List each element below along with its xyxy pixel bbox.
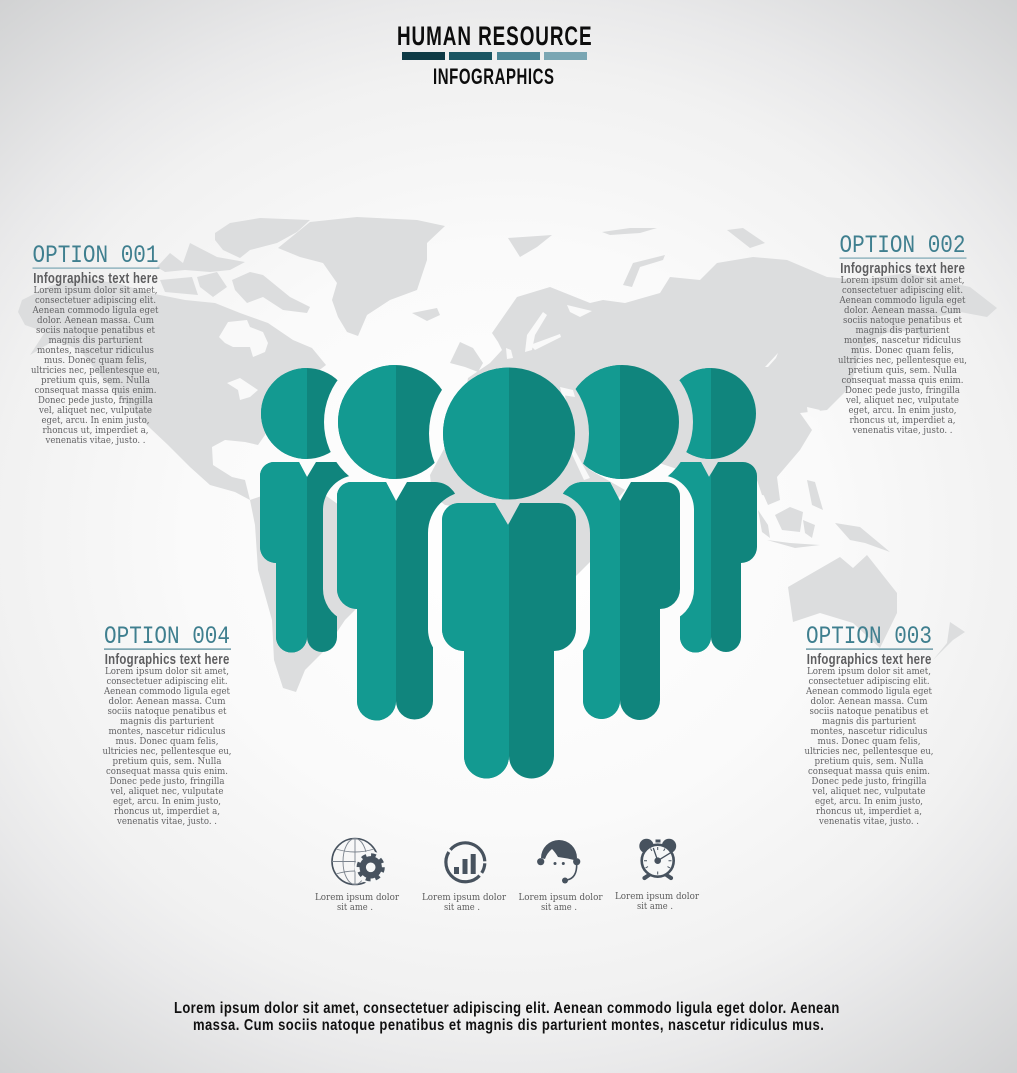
icon caption: globe: sit ame . (337, 902, 373, 913)
map: Arctic islands (157, 218, 310, 313)
panel: option 002: Infographics text here (840, 259, 965, 276)
panel: option 001: Infographics text here (33, 269, 158, 286)
panel: option 001: eget, arcu. In enim justo, (42, 415, 150, 426)
panel: option 002: Lorem ipsum dolor sit amet, (840, 275, 965, 286)
panel: option 002: sociis natoque penatibus et (843, 315, 962, 326)
panel: option 002: pretium quis, sem. Nulla (848, 365, 957, 376)
panel: option 004: rhoncus ut, imperdiet a, (114, 806, 220, 817)
panel: option 003: consectetuer adipiscing elit. (808, 676, 930, 687)
panel: option 002: mus. Donec quam felis, (851, 345, 954, 356)
icon: headset agent (537, 840, 580, 884)
panel: option 002: Donec pede justo, fringilla (845, 385, 960, 396)
panel: option 004: montes, nascetur ridiculus (108, 726, 226, 737)
panel: option 002: venenatis vitae, justo. . (852, 425, 953, 436)
person: inner right (560, 365, 680, 720)
icon caption: clock: sit ame . (637, 901, 673, 912)
panel: option 001: rhoncus ut, imperdiet a, (42, 425, 149, 436)
panel: option 004 (102, 622, 232, 827)
panel: option 002: ultricies nec, pellentesque eu, (838, 355, 967, 366)
panel: option 003: eget, arcu. In enim justo, (815, 796, 923, 807)
panel: option 001: ultricies nec, pellentesque eu, (31, 365, 160, 376)
icon: alarm clock (639, 839, 676, 880)
heading: Human Resource: HUMAN RESOURCE (397, 21, 592, 51)
panel: option 004: consectetuer adipiscing elit. (106, 676, 228, 687)
panel: option 001: pretium quis, sem. Nulla (41, 375, 150, 386)
map: Africa (430, 425, 625, 640)
panel: option 003: vel, aliquet nec, vulputate (812, 786, 926, 797)
panel: option 002: magnis dis parturient (856, 325, 950, 336)
icon caption: headset: Lorem ipsum dolor (518, 892, 603, 903)
panel: option 004: Donec pede justo, fringilla (110, 776, 225, 787)
panel: option 001: sociis natoque penatibus et (36, 325, 155, 336)
panel: option 002: consequat massa quis enim. (842, 375, 964, 386)
map: water bodies (219, 305, 820, 480)
panel: option 003: Lorem ipsum dolor sit amet, (807, 666, 931, 677)
panel: option 003: pretium quis, sem. Nulla (814, 756, 924, 767)
panel: option 004: venenatis vitae, justo. . (116, 816, 217, 827)
colour bars (402, 52, 587, 60)
panel: option 001: mus. Donec quam felis, (44, 355, 147, 366)
icon caption: headset: sit ame . (541, 902, 577, 913)
panel: option 004: magnis dis parturient (120, 716, 214, 727)
panel: option 001: Lorem ipsum dolor sit amet, (34, 285, 158, 296)
panel: option 004: OPTION 004 (104, 622, 230, 651)
footer text (174, 1000, 839, 1034)
panel: option 001: venenatis vitae, justo. . (45, 435, 146, 446)
panel: option 002: consectetuer adipiscing elit. (842, 285, 963, 296)
panel: option 004: dolor. Aenean massa. Cum (108, 696, 226, 707)
panel: option 002 (838, 231, 967, 436)
map: North America (18, 278, 326, 500)
icon caption: chart: sit ame . (444, 902, 480, 913)
panel: option 003 (804, 622, 934, 827)
panel: option 001 (31, 241, 160, 446)
person: far right (660, 368, 757, 652)
panel: option 001: OPTION 001 (32, 241, 158, 270)
icon caption: clock (615, 891, 699, 912)
heading: Infographics: INFOGRAPHICS (433, 64, 554, 89)
panel: option 003: magnis dis parturient (822, 716, 916, 727)
panel: option 003: mus. Donec quam felis, (818, 736, 921, 747)
panel: option 002: vel, aliquet nec, vulputate (845, 395, 959, 406)
map: Arctic Russian islands (508, 228, 765, 287)
icon caption: chart (422, 892, 506, 913)
panel: option 003: venenatis vitae, justo. . (818, 816, 919, 827)
panel: option 001: dolor. Aenean massa. Cum (37, 315, 154, 326)
person: far left (260, 368, 350, 652)
panel: option 003: rhoncus ut, imperdiet a, (816, 806, 922, 817)
panel: option 002: montes, nascetur ridiculus (844, 335, 961, 346)
panel: option 003: OPTION 003 (806, 622, 932, 651)
panel: option 004: sociis natoque penatibus et (108, 706, 227, 717)
panel: option 003: sociis natoque penatibus et (810, 706, 929, 717)
icon caption: globe: Lorem ipsum dolor (315, 892, 399, 903)
panel: option 001: Donec pede justo, fringilla (38, 395, 153, 406)
icon: globe and gear (332, 838, 387, 884)
panel: option 004: ultricies nec, pellentesque eu, (102, 746, 232, 757)
footer text: massa. Cum sociis natoque penatibus et magnis dis parturient montes, nascetur ridiculus mus. (193, 1017, 824, 1034)
panel: option 003: Aenean commodo ligula eget (805, 686, 932, 697)
map: Greenland (278, 217, 445, 336)
panel: option 001: consectetuer adipiscing elit. (35, 295, 156, 306)
world map (18, 217, 997, 692)
icon caption: chart: Lorem ipsum dolor (422, 892, 506, 903)
panel: option 004: Aenean commodo ligula eget (103, 686, 230, 697)
panel: option 001: consequat massa quis enim. (34, 385, 157, 396)
icon caption: headset (518, 892, 603, 913)
panel: option 004: Lorem ipsum dolor sit amet, (105, 666, 229, 677)
panel: option 001: magnis dis parturient (48, 335, 143, 346)
panel: option 002: OPTION 002 (840, 231, 966, 260)
panel: option 003: ultricies nec, pellentesque eu, (804, 746, 934, 757)
icon caption: globe (315, 892, 399, 913)
panel: option 004: pretium quis, sem. Nulla (112, 756, 222, 767)
panel: option 002: Aenean commodo ligula eget (839, 295, 966, 306)
panel: option 003: montes, nascetur ridiculus (810, 726, 928, 737)
map: Iceland and Britain (412, 308, 483, 372)
panel: option 003: Donec pede justo, fringilla (812, 776, 927, 787)
panel: option 001: montes, nascetur ridiculus (37, 345, 154, 356)
panel: option 003: Infographics text here (807, 650, 931, 667)
panel: option 004: vel, aliquet nec, vulputate (110, 786, 224, 797)
person: centre (442, 368, 576, 779)
panel: option 002: dolor. Aenean massa. Cum (844, 305, 961, 316)
panel: option 001: vel, aliquet nec, vulputate (38, 405, 152, 416)
panel: option 002: rhoncus ut, imperdiet a, (850, 415, 956, 426)
panel: option 002: eget, arcu. In enim justo, (848, 405, 957, 416)
title (397, 21, 592, 89)
map: South-East Asia (757, 480, 890, 552)
map: Eurasia (465, 257, 997, 505)
icon caption: clock: Lorem ipsum dolor (615, 891, 699, 902)
panel: option 001: Aenean commodo ligula eget (32, 305, 159, 316)
panel: option 003: consequat massa quis enim. (808, 766, 930, 777)
map: South America (250, 488, 385, 692)
map: Australia and New Zealand (788, 555, 965, 660)
panel: option 004: mus. Donec quam felis, (116, 736, 219, 747)
footer text: Lorem ipsum dolor sit amet, consectetuer adipiscing elit. Aenean commodo ligula eget dolor. Aenean (174, 1000, 839, 1017)
panel: option 003: dolor. Aenean massa. Cum (810, 696, 928, 707)
panel: option 004: Infographics text here (105, 650, 229, 667)
panel: option 004: consequat massa quis enim. (106, 766, 228, 777)
icon: bar chart ring (446, 843, 485, 882)
panel: option 004: eget, arcu. In enim justo, (113, 796, 221, 807)
person: inner left (337, 365, 458, 720)
